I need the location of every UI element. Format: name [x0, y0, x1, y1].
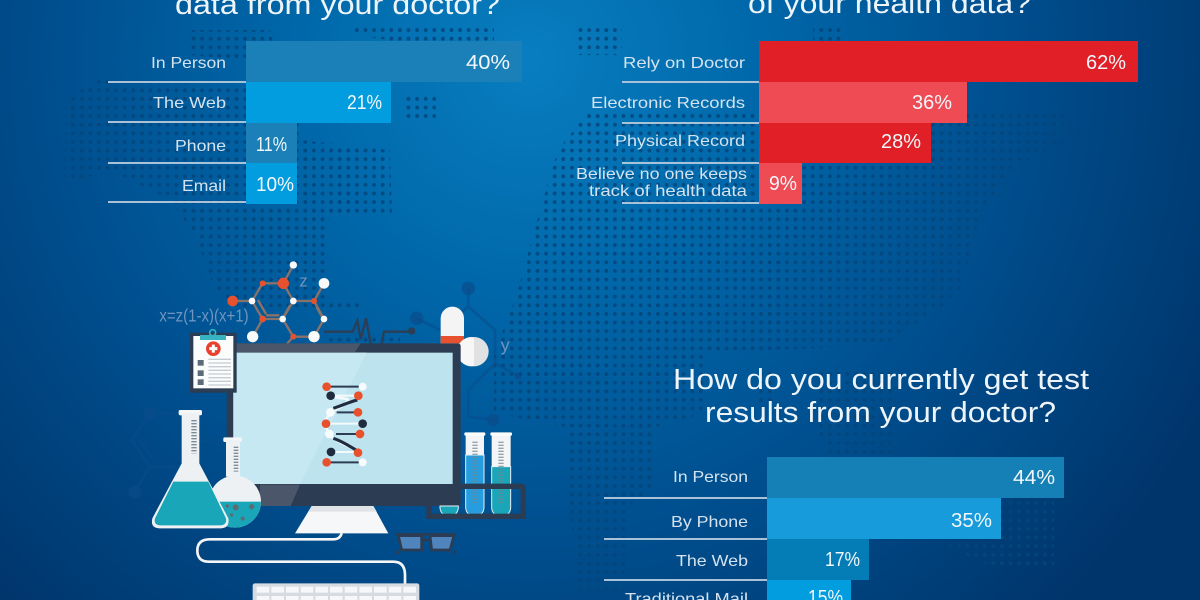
bar: believe no one keeps track 9%: track of health data: [589, 183, 747, 200]
bar: email 10%: 10%: [256, 174, 294, 196]
bar: in person 44%: In Person: [673, 469, 748, 486]
bar: the web 21%: [153, 82, 391, 123]
keyboard: [253, 583, 419, 600]
ECG line: [324, 318, 415, 344]
bar: physical record 28%: [615, 123, 931, 163]
bar: by phone 35%: [671, 498, 1001, 539]
bar: by phone 35%: 35%: [951, 510, 992, 532]
bar: rely on doctor 62%: [623, 41, 1138, 82]
bar: rely on doctor 62%: Rely on Doctor: [623, 55, 746, 72]
conical flask: [152, 410, 229, 528]
faint background molecules: [128, 282, 522, 498]
monitor: [227, 343, 461, 533]
bar: phone 11%: Phone: [175, 138, 226, 155]
bar: electronic records 36%: [591, 82, 967, 123]
title: test results question: results from your doctor?: [705, 397, 1056, 429]
bar: in person 40%: 40%: [466, 52, 510, 74]
molecule: [227, 261, 329, 345]
bar: believe no one keeps track 9%: 9%: [769, 173, 797, 195]
bar: email 10%: [182, 163, 297, 204]
illustration: medical lab and computer: [128, 261, 523, 600]
bar: the web 17%: [676, 539, 869, 580]
bar: by phone 35%: By Phone: [671, 514, 748, 531]
title: test results question: How do you currently get test: [673, 364, 1089, 396]
bar: believe no one keeps track 9%: Believe no one keeps: [576, 166, 747, 183]
chart: how you get data from your doctor: [108, 41, 522, 204]
bar: physical record 28%: 28%: [881, 131, 921, 153]
cable: [197, 533, 405, 584]
bar: phone 11%: 11%: [256, 134, 287, 156]
formula text: x=z(1-x)(x+1): [159, 306, 249, 326]
variable y: y: [501, 335, 510, 355]
variable z: z: [299, 272, 308, 291]
bar: in person 44%: 44%: [1013, 467, 1055, 489]
glasses: [395, 534, 456, 554]
bar: the web 17%: 17%: [825, 549, 860, 571]
bar: rely on doctor 62%: 62%: [1086, 52, 1126, 74]
chart: how you get test results: [604, 457, 1064, 600]
bar: in person 40%: In Person: [151, 55, 226, 72]
bar: believe no one keeps track 9%: [576, 163, 802, 204]
clipboard: [190, 330, 237, 393]
bar: traditional mail 15%: [625, 580, 851, 600]
bar: email 10%: Email: [182, 178, 226, 195]
title: test results question: [673, 364, 1089, 429]
bar: electronic records 36%: Electronic Records: [591, 95, 745, 112]
bar: phone 11%: [175, 123, 297, 163]
bar: the web 21%: 21%: [347, 92, 382, 114]
bar: electronic records 36%: 36%: [912, 92, 952, 114]
bar: the web 21%: The Web: [153, 95, 226, 112]
DNA helix: [322, 382, 367, 467]
chart: who keeps track of your health data: [576, 41, 1138, 204]
bar: in person 40%: [151, 41, 522, 82]
test tubes and rack: [429, 432, 523, 517]
bar: the web 17%: The Web: [676, 553, 748, 570]
round flask: [212, 437, 261, 528]
pills: [441, 307, 489, 366]
bar: physical record 28%: Physical Record: [615, 133, 745, 150]
bar: in person 44%: [673, 457, 1064, 498]
